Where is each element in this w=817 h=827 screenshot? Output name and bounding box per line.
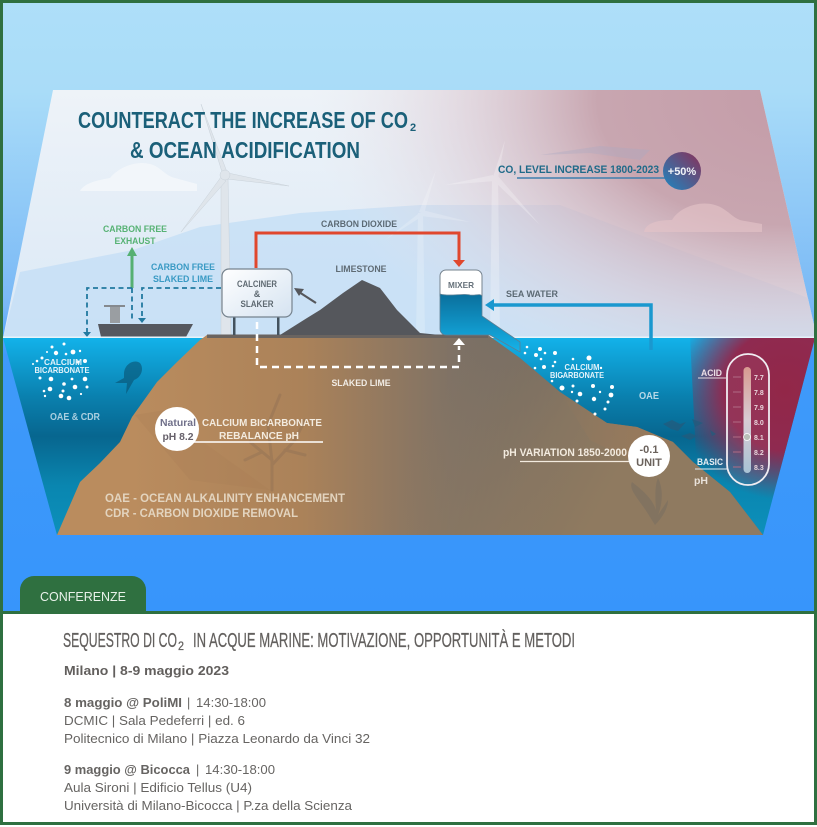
label: calcium bicarbonate right: CALCIUM xyxy=(564,362,600,372)
text: session 9 maggio: | xyxy=(196,763,199,777)
title xyxy=(78,107,416,163)
bubbles: calcium bicarbonate left xyxy=(32,342,88,400)
panel: ocean xyxy=(3,336,815,535)
arrow: carbon dioxide red xyxy=(256,233,465,268)
legend: acronyms: OAE - OCEAN ALKALINITY ENHANCEMENT xyxy=(105,491,346,505)
label: carbon free exhaust: EXHAUST xyxy=(114,236,156,247)
icon: faint wind turbine right xyxy=(445,140,540,335)
icon: coral silhouette xyxy=(245,395,305,490)
label: carbon free exhaust xyxy=(103,224,167,247)
chart: pH thermometer: 8.2 xyxy=(754,450,764,457)
callout: pH variation: pH VARIATION 1850-2000 xyxy=(503,447,627,459)
icon: fish school xyxy=(663,419,716,440)
text: session 9 maggio: 9 maggio @ Bicocca xyxy=(64,763,191,777)
tab: conferenze xyxy=(20,576,146,612)
text: session 8 maggio xyxy=(64,696,370,746)
text: session 8 maggio: DCMIC | Sala Pedeferri | ed. 6 xyxy=(64,714,245,728)
chart: pH thermometer: 7.9 xyxy=(754,405,764,412)
component: calciner and slaker: CALCINER xyxy=(237,279,277,289)
callout: natural pH: REBALANCE pH xyxy=(219,430,299,442)
legend: acronyms: CDR - CARBON DIOXIDE REMOVAL xyxy=(105,506,298,520)
label: carbon dioxide: CARBON DIOXIDE xyxy=(321,219,397,230)
heading: conference title: IN ACQUE MARINE: MOTIVAZIONE, OPPORTUNITÀ E METODI xyxy=(193,629,575,652)
tab: conferenze: CONFERENZE xyxy=(40,589,126,604)
label: calcium bicarbonate right xyxy=(550,362,604,380)
callout: CO2 level increase: +50% xyxy=(668,166,696,178)
label: sea water: SEA WATER xyxy=(506,289,558,300)
component: calciner and slaker: & xyxy=(254,289,261,299)
arrow: sea water intake xyxy=(485,299,651,350)
text: session 9 maggio: Università di Milano-Bicocca | P.za della Scienza xyxy=(64,799,352,813)
callout: natural pH: pH 8.2 xyxy=(162,431,194,443)
label: calcium bicarbonate right: BICARBONATE xyxy=(550,370,604,380)
text: session 9 maggio: Aula Sironi | Edificio Tellus (U4) xyxy=(64,781,252,795)
panel: white info box xyxy=(0,611,817,827)
callout: CO2 level increase: CO, LEVEL INCREASE 1800-2023 xyxy=(498,164,659,176)
text: session 8 maggio: | xyxy=(187,696,190,710)
label: carbon free slaked lime: SLAKED LIME xyxy=(153,274,213,285)
chart: pH thermometer: 7.7 xyxy=(754,375,764,382)
component: calciner and slaker xyxy=(222,269,292,335)
icon: main wind turbine xyxy=(181,104,289,336)
callout: CO2 level increase xyxy=(498,152,701,190)
text: session 9 maggio: 14:30-18:00 xyxy=(205,763,275,777)
title: COUNTERACT THE INCREASE OF CO xyxy=(78,107,408,133)
text: session 8 maggio: 8 maggio @ PoliMI xyxy=(64,696,182,710)
label: basic: BASIC xyxy=(697,457,723,468)
icon: seaweed xyxy=(631,478,668,525)
chart: pH thermometer xyxy=(727,354,769,485)
callout: natural pH: Natural xyxy=(160,417,196,429)
label: calcium bicarbonate left: BICARBONATE xyxy=(34,365,90,375)
callout: pH variation: UNIT xyxy=(636,457,662,469)
text: session 9 maggio xyxy=(64,763,352,813)
label: OAE and CDR: OAE & CDR xyxy=(50,412,101,423)
label: carbon free slaked lime xyxy=(151,262,215,285)
arrow: dashed lime flow to ship and sea xyxy=(83,288,221,337)
icon: cloud right xyxy=(644,204,762,232)
text: place and date: Milano | 8-9 maggio 2023 xyxy=(64,664,229,678)
chart: pH thermometer: 8.0 xyxy=(754,420,764,427)
legend: acronyms xyxy=(105,491,346,520)
chart: pH thermometer: 8.1 xyxy=(754,435,764,442)
arrow: green exhaust xyxy=(127,247,137,288)
icon: ship xyxy=(98,305,193,337)
callout: pH variation xyxy=(503,435,670,477)
arrow: limestone to calciner xyxy=(294,288,316,303)
label: slaked lime: SLAKED LIME xyxy=(332,378,390,389)
panel: atmosphere trapezoid xyxy=(3,90,817,338)
bubbles: calcium bicarbonate right xyxy=(524,346,614,416)
text: session 8 maggio: 14:30-18:00 xyxy=(196,696,266,710)
heading: conference title: 2 xyxy=(178,639,184,653)
label: acid: ACID xyxy=(701,368,722,379)
callout: pH variation: -0.1 xyxy=(640,444,658,456)
heading: conference title xyxy=(63,629,575,653)
label: pH: pH xyxy=(694,475,708,487)
title: 2 xyxy=(410,122,416,134)
arrow: slaked lime dashed xyxy=(257,322,465,367)
chart: pH thermometer: 8.3 xyxy=(754,465,764,472)
icon: jellyfish xyxy=(115,361,142,394)
label: carbon free slaked lime: CARBON FREE xyxy=(151,262,215,273)
icon: faint wind turbine xyxy=(385,170,470,335)
label: carbon free exhaust: CARBON FREE xyxy=(103,224,167,235)
component: mixer tank: MIXER xyxy=(448,280,474,290)
text: session 8 maggio: Politecnico di Milano | Piazza Leonardo da Vinci 32 xyxy=(64,732,370,746)
callout: natural pH: CALCIUM BICARBONATE xyxy=(202,417,322,429)
label: OAE: OAE xyxy=(639,391,659,402)
background sky gradient xyxy=(0,0,817,612)
panel: sea floor xyxy=(57,334,763,535)
component: calciner and slaker: SLAKER xyxy=(240,299,274,309)
icon: cloud left xyxy=(80,163,197,191)
callout: natural pH xyxy=(155,407,323,451)
title: & OCEAN ACIDIFICATION xyxy=(130,137,360,163)
label: calcium bicarbonate left: CALCIUM xyxy=(44,357,82,367)
heading: conference title: SEQUESTRO DI CO xyxy=(63,630,177,652)
label: limestone: LIMESTONE xyxy=(336,264,386,275)
label: calcium bicarbonate left xyxy=(34,357,90,375)
chart: pH thermometer: 7.8 xyxy=(754,390,764,397)
component: mixer tank xyxy=(440,270,520,352)
icon: mountain limestone xyxy=(280,280,440,335)
